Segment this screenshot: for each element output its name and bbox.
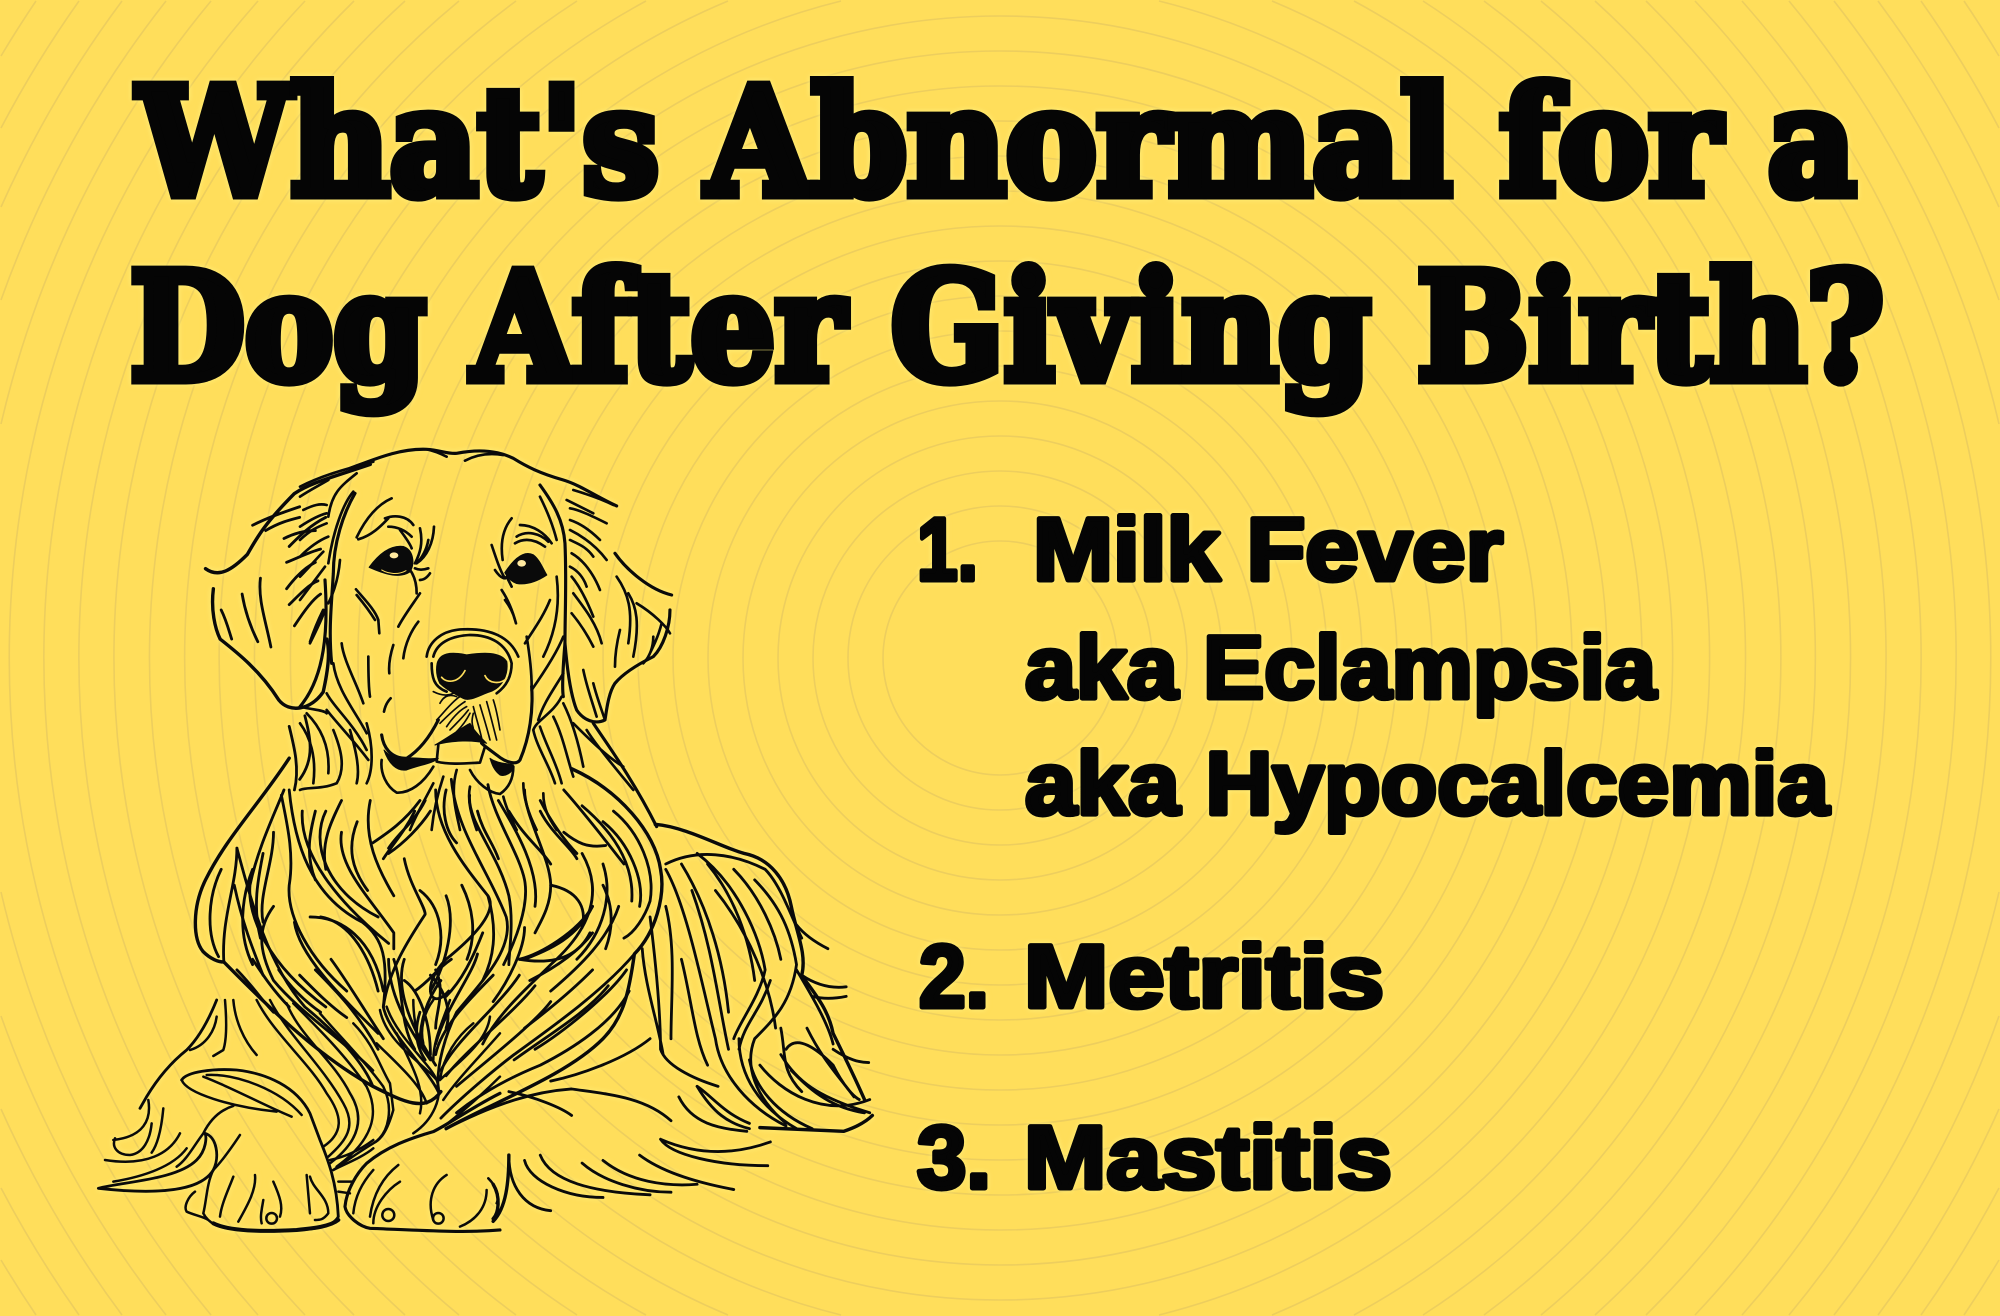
mouth [435,723,487,745]
title: What's Abnormal for a [136,55,1856,229]
item 2: Metritis [919,926,1384,1026]
right eye [505,554,547,584]
item 1: Milk Fever: Milk Fever [1033,499,1503,599]
list of conditions [917,499,1831,1207]
item 3: Mastitis: 3. [917,1107,991,1207]
left eye [369,546,413,575]
item 2: Metritis: Metritis [1024,926,1384,1026]
dog body and fur [195,758,872,1221]
item 1: Milk Fever: aka Eclampsia [1025,617,1658,717]
title [130,55,1884,414]
item 1: Milk Fever [917,499,1831,833]
item 1: Milk Fever: 1. [917,499,978,599]
item 3: Mastitis: Mastitis [1024,1107,1392,1207]
dog left ear [206,464,370,790]
illustration: golden retriever line drawing [98,449,872,1231]
nose [437,653,507,699]
item 2: Metritis: 2. [919,926,989,1026]
dog front legs and paws [98,1000,500,1231]
item 3: Mastitis [917,1107,1392,1207]
item 1: Milk Fever: aka Hypocalcemia [1025,733,1831,833]
dog head [300,449,672,830]
